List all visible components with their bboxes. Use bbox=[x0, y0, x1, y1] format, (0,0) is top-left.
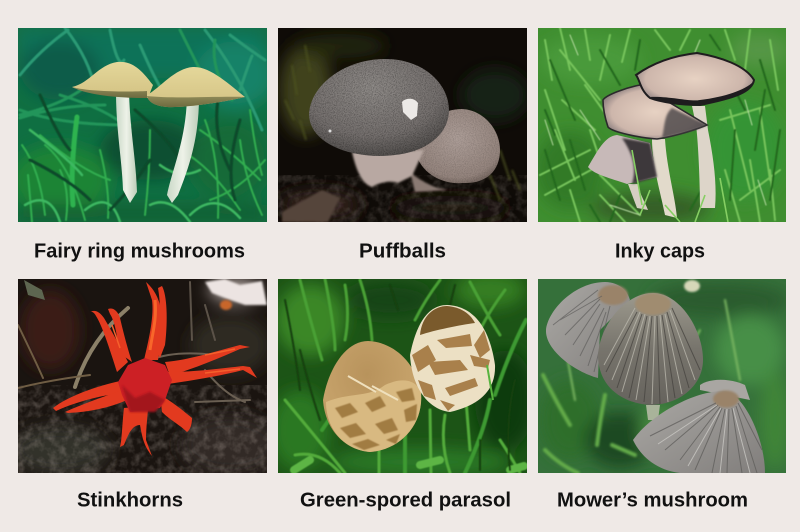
right mushroom egg bbox=[410, 305, 495, 412]
red star fungus bbox=[53, 282, 257, 456]
caption: inky caps: Inky caps bbox=[615, 240, 705, 262]
caption: puffballs: Puffballs bbox=[359, 240, 446, 262]
star arms bbox=[53, 282, 257, 456]
mushroom stems bbox=[116, 92, 199, 203]
panel: mower's mushroom photo bbox=[538, 279, 790, 473]
mushroom caps bbox=[72, 62, 245, 107]
caption: green-spored parasol: Green-spored parasol bbox=[300, 490, 511, 512]
left mushroom egg bbox=[323, 341, 421, 452]
caption: stinkhorns: Stinkhorns bbox=[77, 490, 183, 512]
panel: green-spored parasol photo bbox=[278, 279, 527, 473]
main puffball cap bbox=[309, 59, 449, 159]
second puffball bbox=[410, 109, 500, 192]
back cap bbox=[546, 282, 630, 378]
inky cap stems bbox=[628, 106, 716, 218]
middle cap bbox=[603, 85, 707, 139]
panel: puffballs photo bbox=[278, 28, 529, 222]
lower right cap bbox=[633, 380, 765, 473]
front cap bbox=[598, 293, 703, 405]
panel: inky caps photo bbox=[535, 28, 790, 224]
panel: fairy ring mushrooms photo bbox=[10, 28, 275, 222]
stem bbox=[352, 150, 424, 187]
top cap bbox=[636, 53, 754, 105]
star body bbox=[118, 358, 172, 412]
lower cap bbox=[588, 135, 657, 184]
panel: stinkhorns photo bbox=[10, 279, 280, 475]
caption: fairy ring mushrooms: Fairy ring mushrooms bbox=[34, 240, 245, 262]
caption: mower's mushroom: Mower’s mushroom bbox=[557, 490, 748, 512]
